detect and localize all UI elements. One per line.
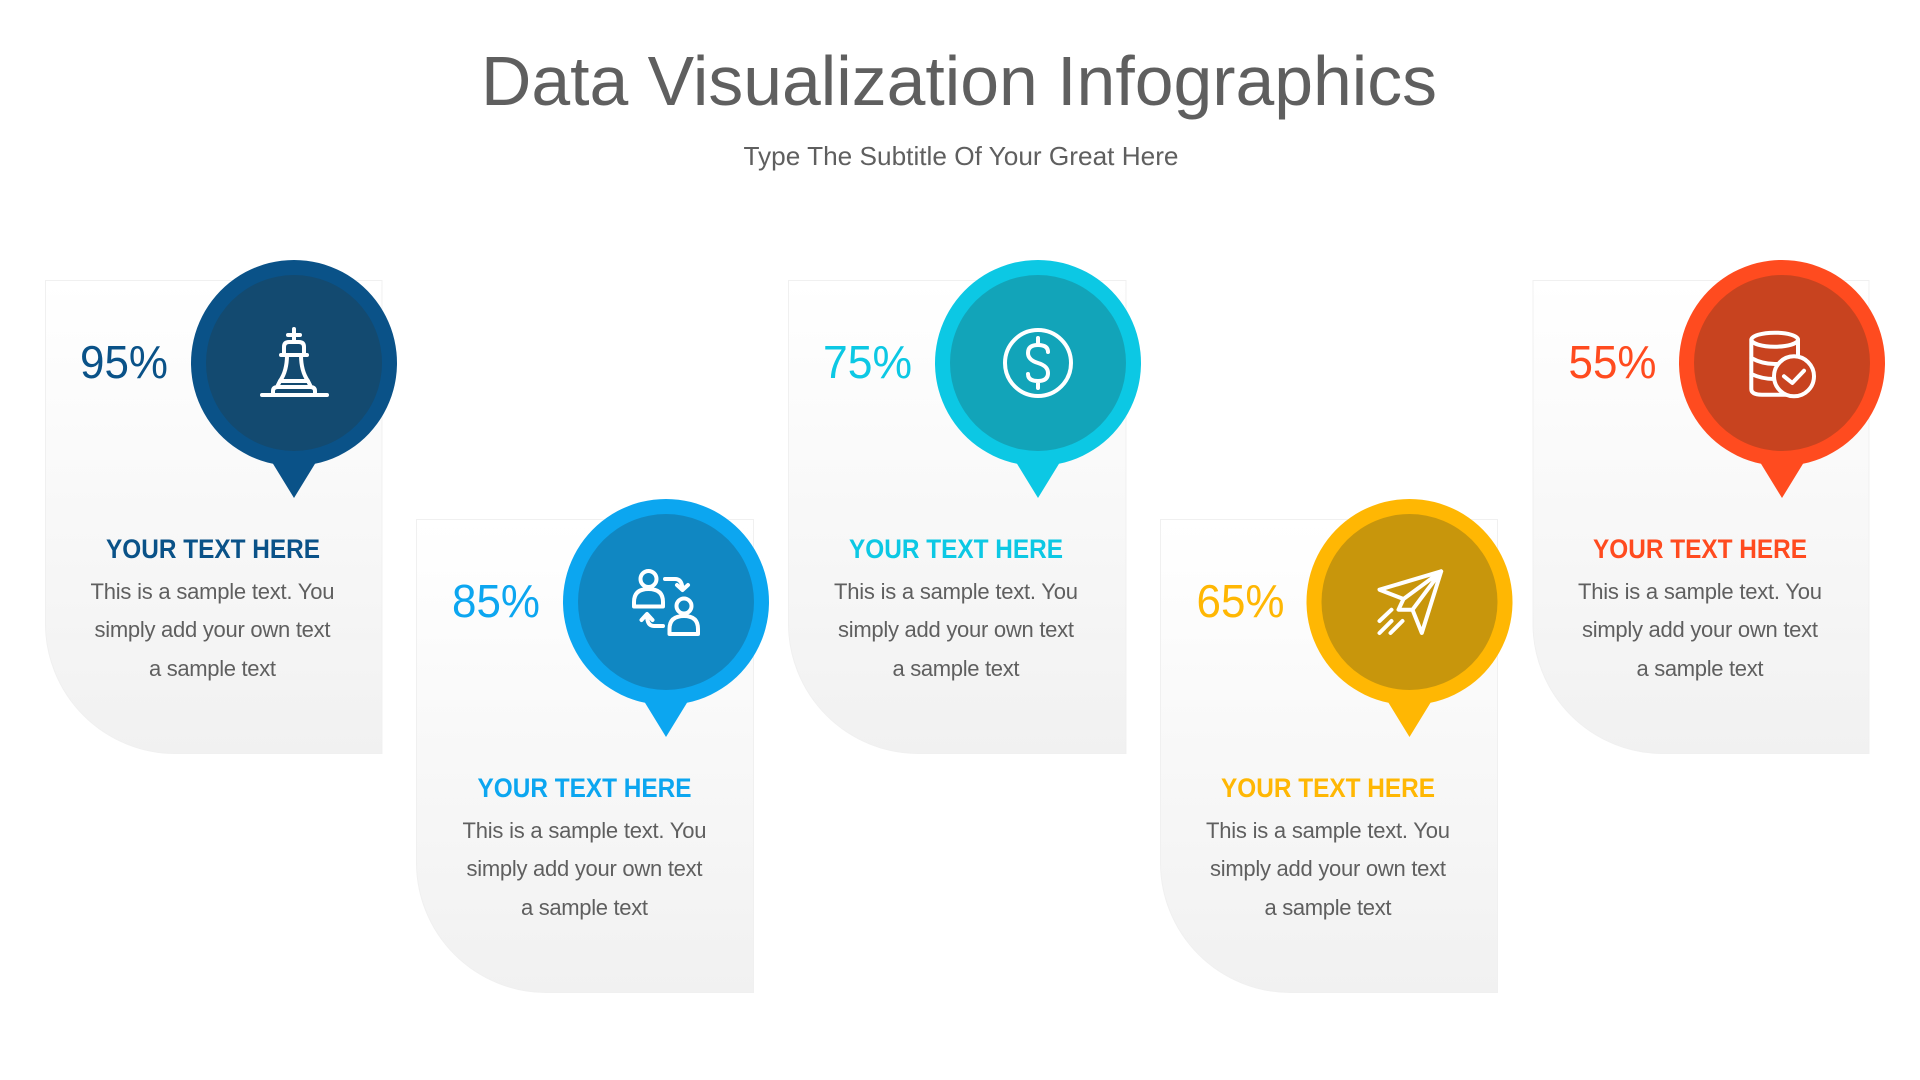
- percentage: 85%: [452, 575, 540, 627]
- body text: a sample text: [1264, 895, 1392, 920]
- card background: [1160, 520, 1498, 992]
- heading: YOUR TEXT HERE: [1593, 534, 1807, 564]
- subtitle: Type The Subtitle Of Your Great Here: [744, 141, 1178, 171]
- panel: 65% card: [1160, 499, 1512, 992]
- panel: 85% card: [416, 499, 769, 992]
- icon: people exchange: [634, 571, 698, 634]
- panel: 75% card: [788, 260, 1141, 754]
- body text: a sample text: [892, 656, 1020, 681]
- body text: This is a sample text. You: [1578, 579, 1822, 604]
- body text: a sample text: [149, 656, 276, 681]
- body text: simply add your own text: [1582, 617, 1818, 642]
- body text: a sample text: [521, 895, 648, 920]
- body text: This is a sample text. You: [1206, 818, 1450, 843]
- icon: database check: [1751, 333, 1814, 396]
- body text: [1578, 579, 1822, 681]
- percentage: 65%: [1196, 575, 1284, 627]
- pin outer shape: [935, 260, 1141, 498]
- body text: simply add your own text: [466, 856, 702, 881]
- pin marker: [563, 499, 769, 737]
- body text: This is a sample text. You: [90, 579, 334, 604]
- card background: [46, 280, 382, 754]
- body text: This is a sample text. You: [834, 579, 1078, 604]
- pin marker: [1679, 260, 1885, 498]
- title: Data Visualization Infographics: [481, 42, 1437, 120]
- heading: YOUR TEXT HERE: [849, 534, 1063, 564]
- card background: [788, 280, 1126, 754]
- percentage: 75%: [823, 336, 912, 388]
- pin outer shape: [191, 260, 397, 498]
- pin marker: [191, 260, 397, 498]
- pin outer shape: [563, 499, 769, 737]
- heading: YOUR TEXT HERE: [106, 534, 320, 564]
- pin outer shape: [1306, 499, 1512, 737]
- pin marker: [1306, 499, 1512, 737]
- pin outer shape: [1679, 260, 1885, 498]
- body text: [1206, 818, 1450, 920]
- body text: simply add your own text: [94, 617, 330, 642]
- panel: 55% card: [1533, 260, 1885, 754]
- icon: chess king: [262, 329, 327, 395]
- body text: This is a sample text. You: [462, 818, 706, 843]
- percentage: 95%: [80, 336, 168, 388]
- pin marker: [935, 260, 1141, 498]
- card background: [416, 520, 754, 992]
- body text: simply add your own text: [838, 617, 1074, 642]
- pin inner circle: [950, 275, 1126, 451]
- body text: [90, 579, 334, 681]
- heading: YOUR TEXT HERE: [478, 773, 692, 803]
- body text: simply add your own text: [1210, 856, 1446, 881]
- pin inner circle: [206, 275, 382, 451]
- pin inner circle: [1694, 275, 1870, 451]
- card background: [1533, 280, 1869, 754]
- panel: 95% card: [46, 260, 397, 754]
- body text: a sample text: [1636, 656, 1764, 681]
- body text: [462, 818, 706, 920]
- heading: YOUR TEXT HERE: [1221, 773, 1435, 803]
- body text: [834, 579, 1078, 681]
- icon: dollar coin: [1005, 330, 1071, 396]
- percentage: 55%: [1568, 336, 1656, 388]
- pin inner circle: [578, 514, 754, 690]
- icon: paper plane: [1380, 571, 1441, 633]
- pin inner circle: [1322, 514, 1498, 690]
